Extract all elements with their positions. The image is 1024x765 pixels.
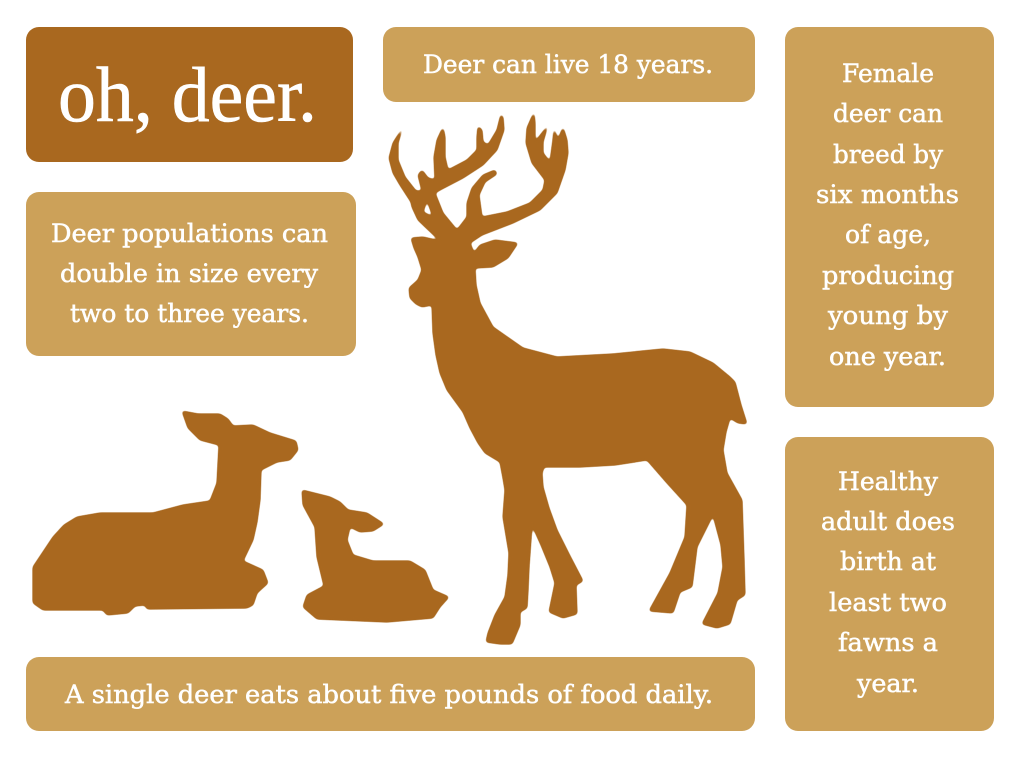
icon: doe silhouette [33, 411, 298, 615]
panel: title [26, 27, 353, 162]
panel: breeding fact [785, 27, 994, 407]
text: lifespan: Deer can live 18 years. [423, 50, 713, 79]
text: food: A single deer eats about five pounds of food daily. [64, 680, 713, 709]
panel: food fact [26, 657, 755, 731]
panel: lifespan fact [383, 27, 755, 102]
text block: breeding: six months [816, 180, 959, 209]
icon: stag silhouette [389, 112, 747, 644]
text block: breeding: one year. [829, 342, 946, 371]
panel: population fact [26, 192, 356, 356]
text block: population: double in size every [60, 259, 319, 288]
text block: birth: fawns a [838, 628, 938, 657]
text block: birth [821, 467, 955, 698]
text block: breeding: of age, [845, 220, 931, 249]
text block: breeding: Female [842, 59, 934, 88]
icon: fawn silhouette [302, 490, 449, 622]
text block: breeding: breed by [833, 140, 944, 169]
text block: birth: birth at [840, 547, 936, 576]
heading: oh, deer.: oh, deer. [58, 51, 317, 138]
text block: breeding: deer can [833, 99, 943, 128]
text block: birth: year. [856, 669, 919, 698]
text block: population: Deer populations can [51, 219, 328, 248]
text block: breeding: producing [822, 261, 954, 290]
text block: breeding: young by [827, 301, 949, 330]
text block: birth: least two [829, 588, 947, 617]
text block: population [51, 219, 328, 328]
panel: birth fact [785, 437, 994, 731]
text block: birth: adult does [821, 507, 955, 536]
text block: population: two to three years. [70, 299, 309, 328]
text block: birth: Healthy [838, 467, 939, 496]
text block: breeding [816, 59, 959, 371]
